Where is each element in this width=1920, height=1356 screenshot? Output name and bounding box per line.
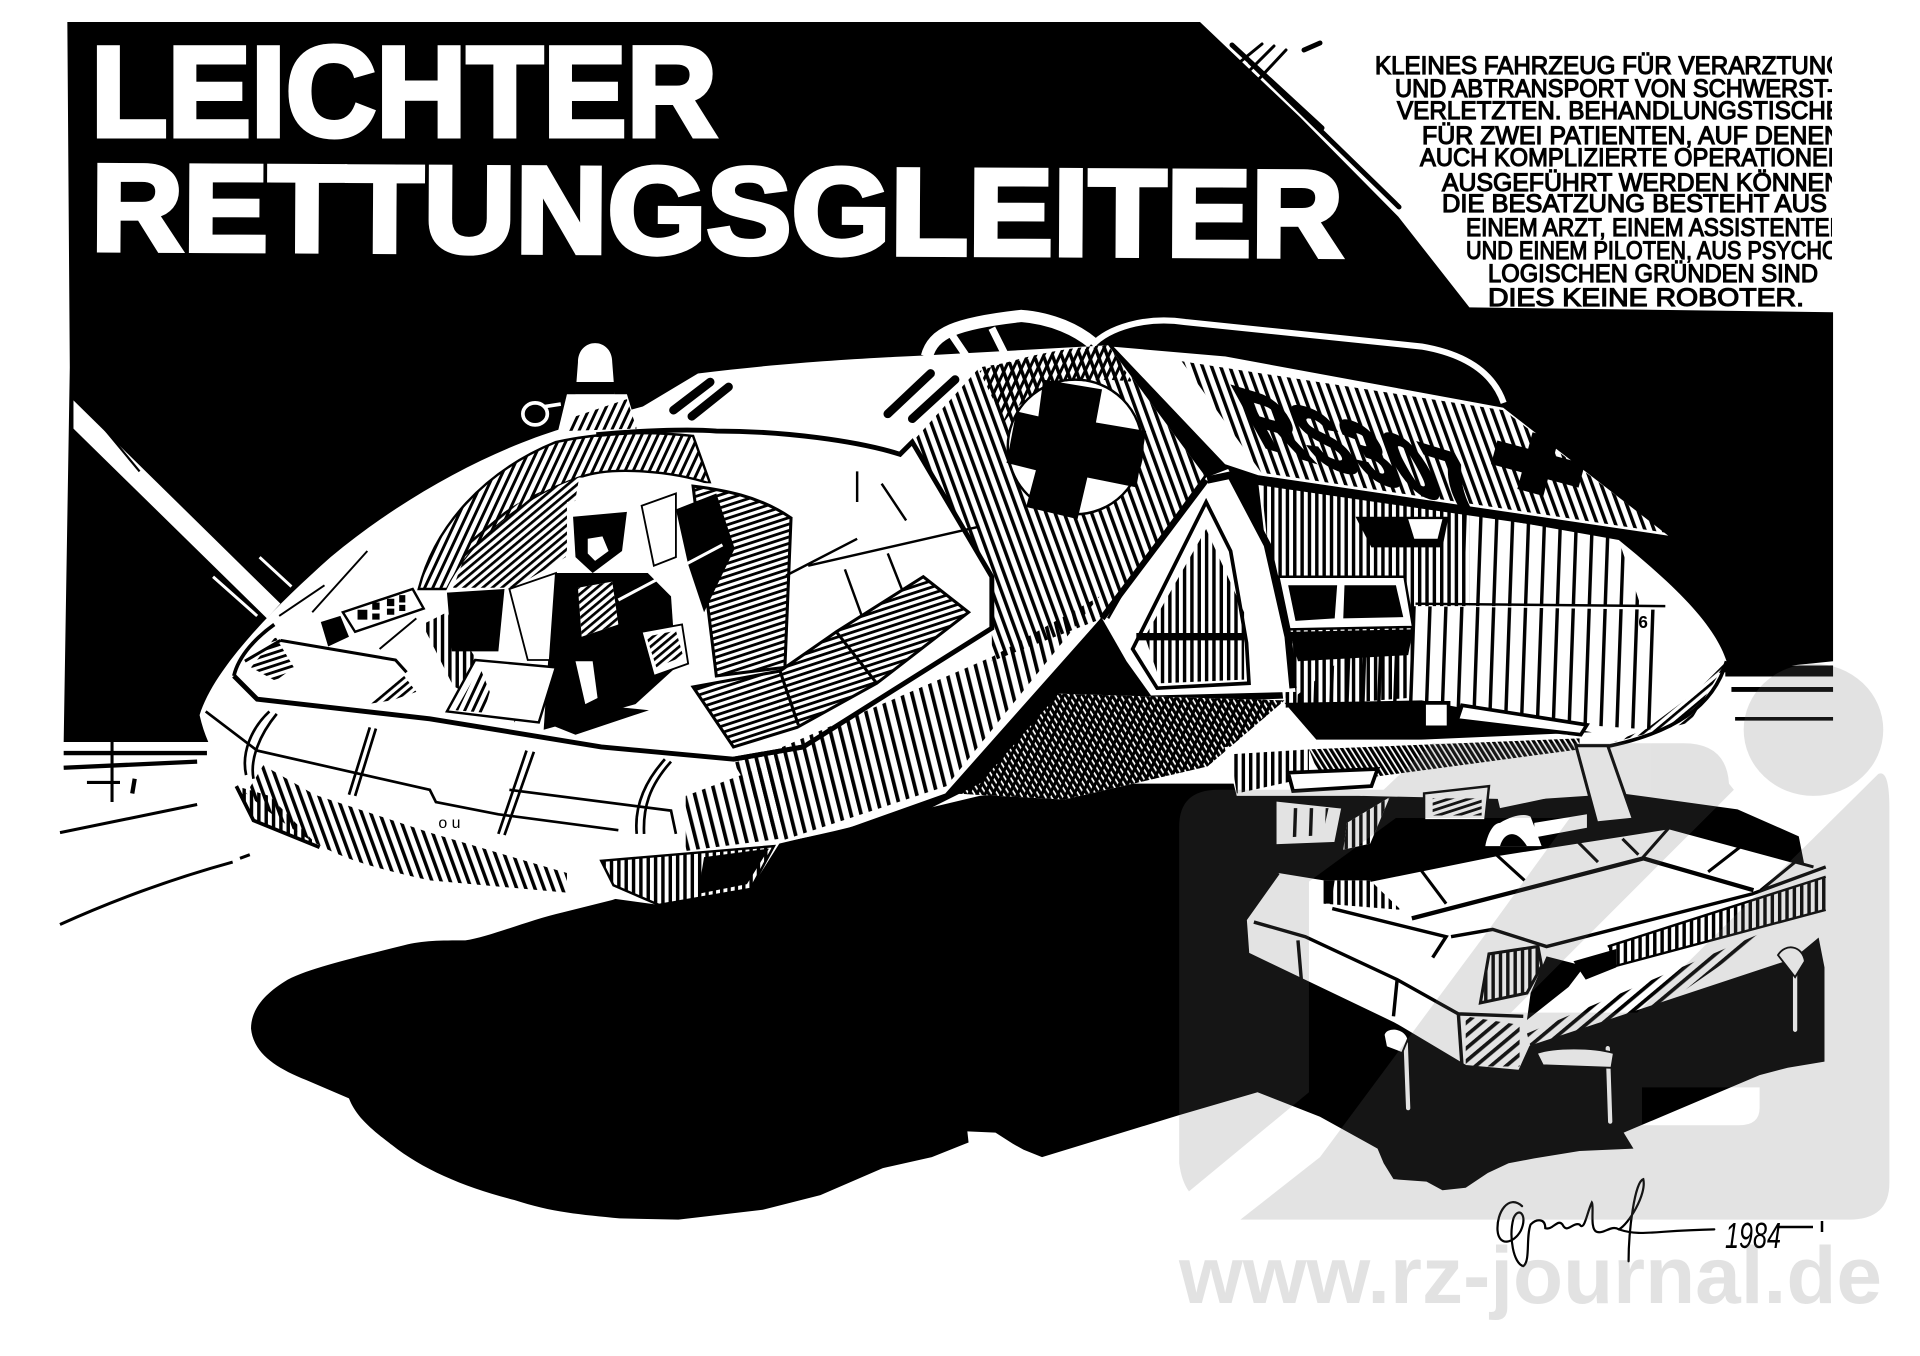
mid band with curved hatching (912, 345, 1206, 661)
description text block: VERLETZTEN. BEHANDLUNGSTISCHE (1397, 97, 1842, 125)
lid panel with registration (1111, 345, 1673, 538)
title: RETTUNGSGLEITER (91, 140, 1344, 284)
interior dark (422, 478, 716, 735)
floor lines and horizon marks (60, 671, 1833, 924)
roof vents (673, 373, 955, 419)
description text block: EINEM ARZT, EINEM ASSISTENTEN (1466, 214, 1846, 242)
description text block: DIES KEINE ROBOTER. (1488, 284, 1804, 312)
year flourish (1779, 1221, 1822, 1232)
sled legs (1406, 975, 1795, 1122)
arch hatch ring (419, 433, 710, 589)
description text block: DIE BESATZUNG BESTEHT AUS (1442, 190, 1827, 218)
title (91, 21, 1344, 284)
rear body with vertical ribs (1258, 476, 1727, 737)
hull lower hatch (246, 765, 567, 893)
underside dark band (1284, 700, 1592, 740)
rear hull (927, 316, 1727, 749)
cockpit top frame (596, 430, 992, 759)
number 6: 6 (1638, 612, 1648, 632)
front hull and cockpit (200, 343, 1296, 905)
cockpit rim (234, 676, 803, 759)
front pads (234, 637, 649, 735)
roof tubes (927, 316, 1504, 403)
seat hatch (693, 486, 791, 676)
belly shading lobe (955, 693, 1284, 800)
diagonal pen strokes beside the title block (1232, 43, 1399, 207)
beacon light (523, 343, 639, 435)
side door (1102, 469, 1296, 696)
description text block (1375, 52, 1846, 312)
description text block: LOGISCHEN GRÜNDEN SIND (1488, 260, 1818, 288)
loading machinery (1224, 703, 1633, 850)
seat headrest (642, 493, 676, 566)
signature (1497, 1179, 1714, 1266)
rear bed (693, 577, 969, 747)
description text block: AUCH KOMPLIZIERTE OPERATIONEN (1420, 144, 1845, 172)
description text block: UND EINEM PILOTEN, AUS PSYCHO- (1466, 237, 1846, 265)
mattress (1370, 828, 1813, 918)
under block (601, 846, 774, 905)
pilot figure (509, 493, 722, 730)
scene: black night backdrop (64, 22, 1833, 742)
hull rim hatch right (733, 596, 1100, 841)
red cross emblem (1007, 380, 1146, 519)
watermark url: www.rz-journal.de (1178, 1231, 1882, 1321)
description text block: FÜR ZWEI PATIENTEN, AUF DENEN (1422, 122, 1842, 150)
wheel-well dark edge on the right (1614, 661, 1727, 742)
cockpit inner white wall (784, 447, 986, 673)
front hull and cockpit: o u (438, 815, 460, 832)
hull seams (245, 711, 671, 835)
description text block: UND ABTRANSPORT VON SCHWERST- (1395, 75, 1835, 103)
title: LEICHTER (91, 21, 717, 164)
watermark logo (1179, 664, 1889, 1220)
ground shadow (251, 784, 1824, 1220)
instrument console (279, 551, 424, 649)
hull silhouette (200, 345, 1206, 905)
signature year: 1984 (1725, 1215, 1781, 1256)
stretcher sled (1245, 828, 1827, 1122)
registration number: RS307 (1218, 366, 1501, 535)
description text block: KLEINES FAHRZEUG FÜR VERARZTUNG (1375, 52, 1845, 80)
side windows (1356, 517, 1449, 547)
black gap wedge (784, 473, 1218, 851)
description text block: AUSGEFÜHRT WERDEN KÖNNEN (1442, 169, 1842, 197)
cross on lid (1487, 424, 1589, 504)
